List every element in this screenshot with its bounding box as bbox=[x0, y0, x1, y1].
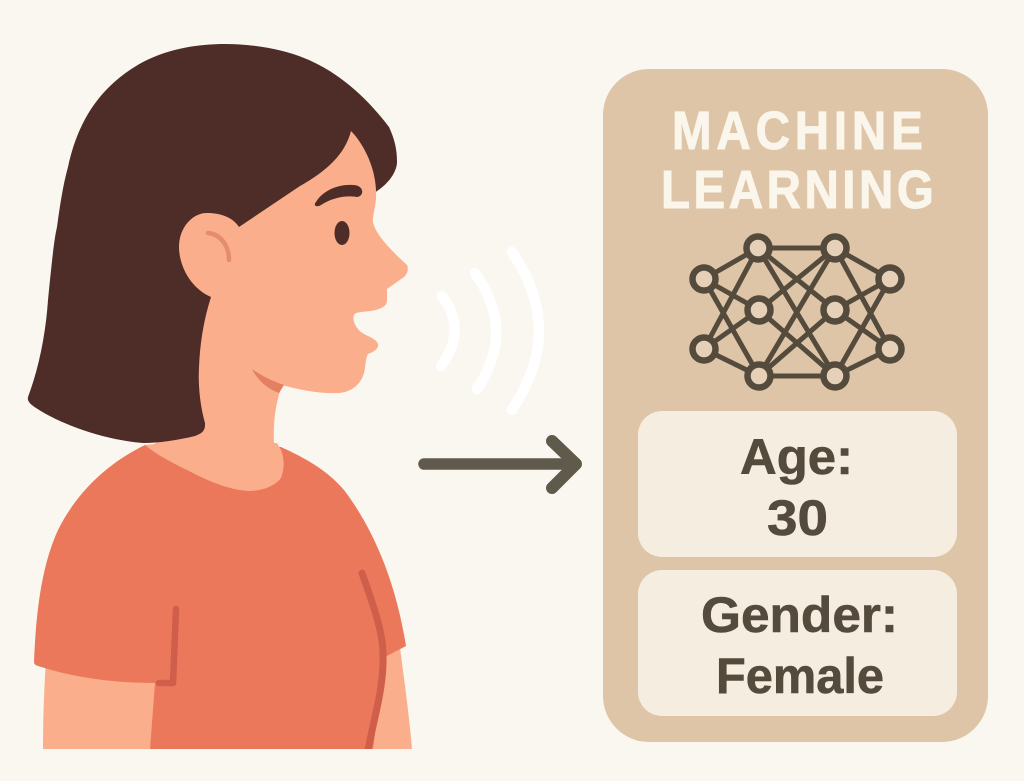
eyebrow bbox=[315, 185, 362, 206]
title: MACHINE bbox=[672, 100, 923, 161]
title bbox=[661, 100, 934, 220]
face and neck bbox=[145, 131, 408, 491]
sound waves bbox=[441, 252, 539, 410]
icon: neural network bbox=[692, 236, 902, 388]
ear inner line bbox=[208, 233, 229, 260]
eye bbox=[334, 221, 350, 245]
panel background bbox=[603, 69, 988, 742]
hair bbox=[28, 44, 397, 443]
card: age: 30 bbox=[767, 490, 828, 546]
card: age bbox=[638, 411, 957, 557]
card: age: Age: bbox=[740, 429, 853, 485]
person speaking in profile bbox=[28, 44, 412, 761]
arrow bbox=[424, 441, 576, 488]
card: gender bbox=[638, 570, 957, 716]
title: LEARNING bbox=[661, 159, 934, 220]
sleeve seam bbox=[159, 609, 176, 683]
panel: machine learning bbox=[603, 69, 988, 742]
card: gender: Female bbox=[716, 648, 884, 704]
jaw shadow bbox=[252, 369, 284, 393]
card: gender: Gender: bbox=[701, 587, 898, 643]
left arm bbox=[43, 660, 160, 749]
side seam bbox=[362, 573, 383, 756]
right arm bbox=[368, 648, 412, 749]
t-shirt bbox=[34, 445, 406, 749]
